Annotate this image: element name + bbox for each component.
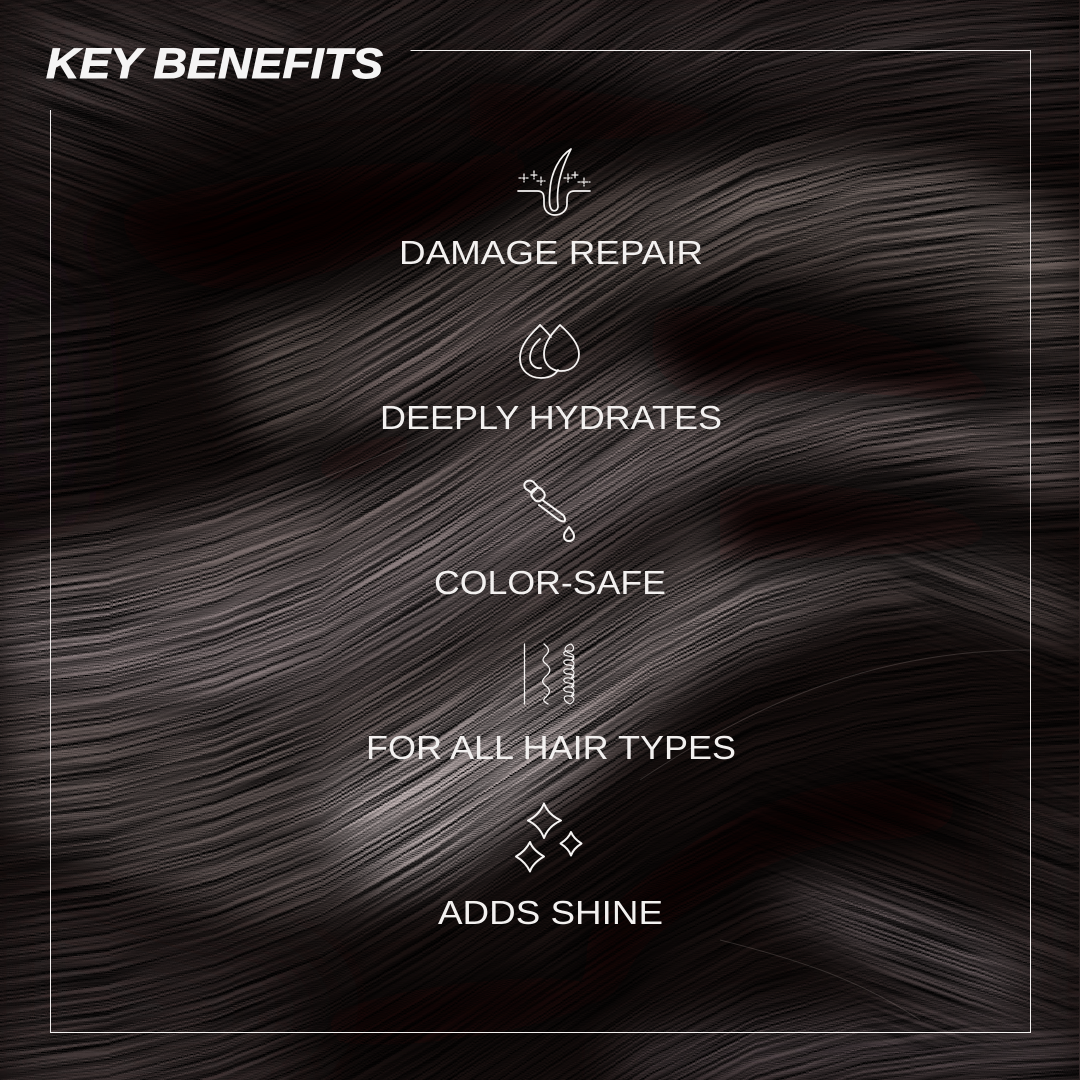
benefit: color-safe bbox=[434, 481, 666, 602]
icon: hair types straight wavy curly bbox=[524, 644, 574, 704]
benefit: for all hair types bbox=[366, 644, 736, 767]
label: deeply hydrates: DEEPLY HYDRATES bbox=[380, 400, 722, 437]
icon: hair follicle repair bbox=[518, 149, 590, 215]
title: KEY BENEFITS bbox=[46, 40, 383, 88]
benefit: deeply hydrates bbox=[380, 325, 722, 437]
benefit: adds shine bbox=[438, 804, 663, 932]
icon: water drops bbox=[520, 325, 579, 378]
label: color-safe: COLOR-SAFE bbox=[434, 565, 666, 602]
icon: dropper bbox=[524, 481, 574, 541]
deep shadow areas bbox=[110, 80, 1040, 1046]
label: for all hair types: FOR ALL HAIR TYPES bbox=[366, 730, 736, 767]
icon: sparkles bbox=[516, 804, 582, 872]
label: damage repair: DAMAGE REPAIR bbox=[399, 235, 703, 272]
benefit: damage repair bbox=[399, 149, 703, 272]
label: adds shine: ADDS SHINE bbox=[438, 895, 663, 932]
